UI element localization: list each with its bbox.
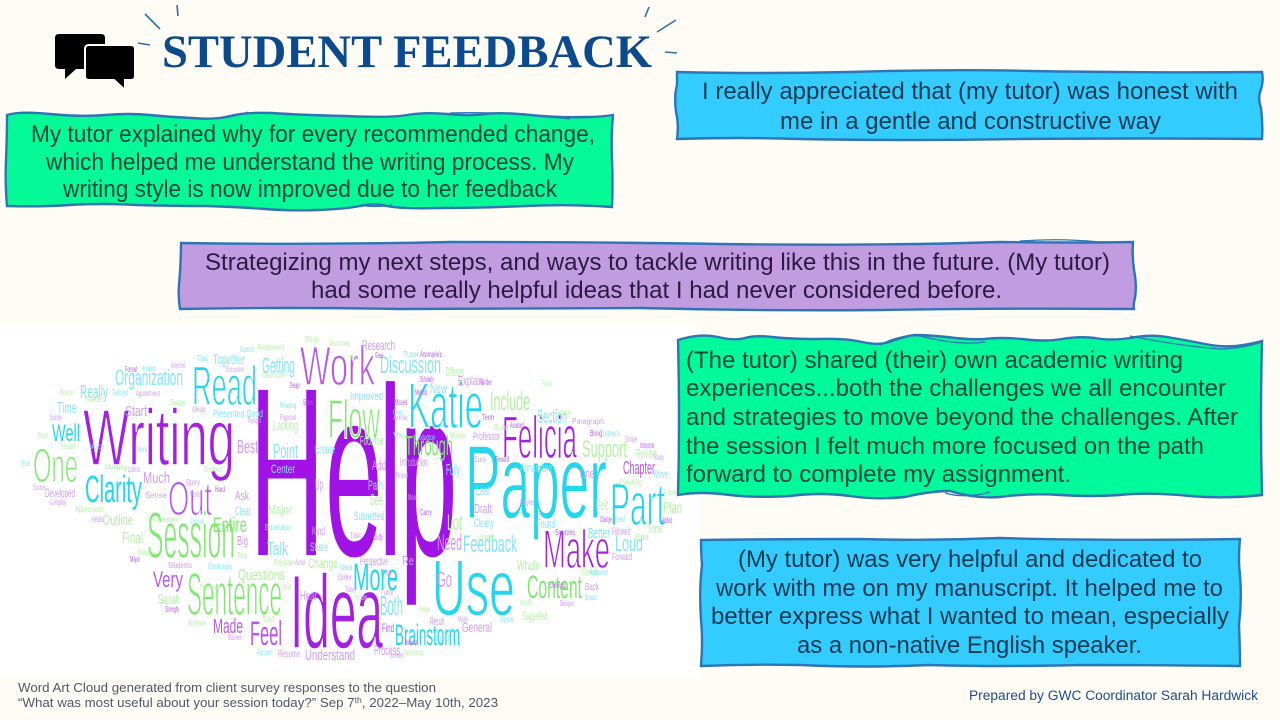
title rays — [138, 5, 677, 53]
medium words: Center — [271, 462, 295, 476]
medium words: Result — [430, 616, 444, 628]
quote text: I really appreciated that (my tutor) was honest with — [702, 78, 1238, 105]
medium words: Discussion — [380, 352, 441, 379]
tiny filler words: Simple — [625, 435, 637, 444]
medium words: Through — [405, 430, 453, 461]
large words — [33, 334, 665, 671]
tiny filler words: Edit — [635, 533, 650, 542]
large words: Session — [147, 498, 235, 572]
tiny filler words: Evidence — [138, 548, 153, 557]
quote text: My tutor explained why for every recommended change, — [31, 121, 595, 148]
medium words: Share — [310, 540, 328, 554]
footnote: word cloud source: th — [355, 696, 362, 705]
large words: Writing — [83, 393, 235, 482]
medium words: Felt — [596, 497, 608, 514]
tiny filler words: Recommend — [258, 343, 284, 352]
medium words: Professor — [473, 431, 500, 443]
tiny filler words: Hope — [420, 605, 430, 614]
tiny filler words: Hard — [215, 485, 225, 494]
medium words: More — [353, 557, 398, 599]
medium words: Fully — [446, 462, 460, 479]
medium words: Path — [368, 477, 383, 493]
tiny filler words: Explanation — [265, 523, 291, 532]
tiny filler words: Tips — [197, 354, 208, 363]
tiny filler words: Helpful — [92, 515, 104, 524]
tiny filler words: Think — [380, 568, 393, 577]
tiny filler words: Writer — [480, 378, 492, 387]
panel: quote about manuscript help — [700, 538, 1241, 666]
tiny filler words: Format — [125, 365, 137, 374]
medium words: Best — [237, 437, 258, 457]
medium words: Feedback — [463, 531, 518, 558]
tiny filler words: Summary — [390, 651, 404, 660]
tiny filler words: Source — [33, 483, 45, 492]
tiny filler words: Complete — [50, 498, 66, 507]
tiny filler words: Position — [274, 558, 294, 567]
medium words: Found — [537, 516, 555, 531]
tiny filler words: Encounter — [226, 365, 244, 374]
tiny filler words: Academic — [142, 364, 156, 373]
tiny filler words: Below — [305, 335, 319, 344]
quote text: as a non-native English speaker. — [797, 632, 1142, 659]
medium words: Clearly — [474, 516, 494, 530]
tiny filler words: Vs — [393, 431, 403, 440]
medium words: Up — [315, 477, 323, 494]
medium words: Plan — [663, 500, 682, 517]
panel: quote about shared academic experiences — [678, 335, 1262, 498]
large words: Felicia — [502, 404, 577, 471]
medium words: Find — [382, 621, 394, 635]
medium words: Line — [580, 465, 594, 481]
medium words: Final — [122, 530, 143, 547]
medium words: Very — [153, 567, 183, 592]
medium words: Outline — [103, 512, 133, 529]
medium words: Clear — [235, 504, 251, 518]
tiny filler words: Matter — [458, 615, 468, 624]
medium words: Better — [588, 525, 610, 542]
medium words: Go — [437, 567, 452, 592]
tiny filler words: Design — [290, 381, 300, 390]
footnote: word cloud source — [18, 681, 498, 710]
medium words: Include — [490, 386, 530, 416]
medium words: Getting — [262, 353, 295, 378]
tiny filler words: Mean — [408, 493, 418, 502]
tiny filler words: Concise — [190, 517, 204, 526]
large words: Read — [192, 354, 257, 417]
tiny filler words: Incorporate — [640, 441, 654, 450]
tiny filler words: Sure — [474, 455, 486, 464]
medium words: Loud — [615, 531, 643, 556]
quote text: experiences...both the challenges we all encounter — [686, 375, 1226, 402]
tiny filler words — [22, 335, 688, 660]
largest word: Help — [250, 339, 457, 607]
tiny filler words: Thought — [247, 416, 261, 425]
medium words: Lacking — [273, 417, 298, 433]
quote text: better express what I wanted to mean, especially — [711, 603, 1229, 630]
large words: Flow — [328, 388, 380, 450]
quote text: which helped me understand the writing process. My — [45, 149, 574, 176]
tiny filler words: Production — [415, 433, 435, 442]
tiny filler words: Used — [615, 515, 625, 524]
large words: Out — [168, 473, 212, 526]
tiny filler words: Super — [170, 398, 186, 407]
medium words: General — [462, 619, 492, 635]
tiny filler words: Explore — [60, 388, 73, 397]
medium words: Understand — [305, 647, 355, 664]
tiny filler words: Unit — [283, 583, 291, 592]
medium words: See — [370, 492, 383, 509]
tiny filler words: Challenges — [208, 562, 232, 571]
large words: Paper — [465, 424, 607, 541]
large words: Make — [543, 518, 610, 580]
tiny filler words: Task — [237, 551, 248, 560]
large words: Sentence — [187, 561, 282, 628]
medium words: Start — [125, 403, 148, 420]
tiny filler words: Latest — [128, 465, 140, 474]
tiny filler words: Tutor — [380, 588, 394, 597]
tiny filler words: Reword — [495, 455, 509, 464]
panel: quote about strategizing next steps — [179, 240, 1136, 310]
medium words: Back — [585, 582, 600, 593]
medium words: Both — [380, 590, 403, 621]
footnote: word cloud source: “What was most useful about your session today?” Sep 7 — [18, 696, 334, 710]
tiny filler words: Proposal — [280, 413, 296, 422]
medium words: Change — [308, 555, 338, 571]
tiny filler words: Example — [50, 413, 62, 422]
tiny filler words: Method — [415, 388, 427, 397]
tiny filler words: Picture — [555, 408, 571, 417]
tiny filler words: Module — [450, 431, 466, 440]
medium words: Feel — [250, 615, 282, 653]
tiny filler words: Voice — [90, 442, 104, 451]
tiny filler words: Scholarly — [420, 375, 434, 384]
tiny filler words: Appointment — [136, 389, 160, 398]
tiny filler words: Already — [192, 405, 206, 414]
tiny filler words: Today's — [600, 429, 620, 438]
tiny filler words: Voice — [190, 490, 202, 499]
medium words: Developed — [45, 486, 75, 500]
medium words: Press — [436, 633, 450, 645]
tiny filler words: Appreciate — [75, 505, 103, 514]
medium words: Made — [213, 616, 243, 638]
quote text — [711, 546, 1229, 659]
medium words: Support — [582, 436, 627, 463]
tiny filler words: Writers — [350, 353, 360, 362]
quote text: Strategizing my next steps, and ways to tackle writing like this in the future. (My tutor) — [205, 249, 1110, 276]
tiny filler words: Meaning — [280, 401, 296, 410]
tiny filler words: Gather — [85, 395, 103, 404]
medium words: Re — [402, 553, 414, 568]
large words: Katie — [408, 369, 483, 442]
medium words: Presented Good — [213, 409, 263, 420]
tiny filler words: Future — [664, 488, 676, 497]
medium words: Forward — [612, 552, 632, 563]
medium words: Talk — [267, 539, 289, 559]
tiny filler words: Sources — [555, 528, 575, 537]
word cloud — [0, 326, 700, 678]
tiny filler words: End — [22, 459, 30, 468]
tiny filler words: Assignment — [590, 568, 608, 577]
quote text — [31, 121, 595, 203]
quote text — [702, 78, 1238, 135]
quote text: the session I felt much more focused on the path — [686, 433, 1204, 460]
tiny filler words: Construction — [262, 371, 284, 380]
tiny filler words: Focus — [542, 379, 552, 388]
medium words: Big — [237, 533, 248, 548]
tiny filler words: Missed — [395, 398, 407, 407]
quote text: writing style is now improved due to her feedback — [62, 176, 558, 203]
tiny filler words: Unify — [373, 533, 383, 542]
medium words: Chapter — [623, 458, 655, 478]
tiny filler words: Information — [147, 515, 179, 524]
medium words: Resume — [278, 649, 300, 660]
tiny filler words: Show — [303, 398, 313, 407]
large words: Work — [300, 334, 376, 397]
medium words: Tone — [647, 520, 663, 536]
footnote: word cloud source: , 2022–May 10th, 2023 — [362, 696, 498, 710]
tiny filler words: Interpret — [171, 361, 185, 370]
tiny filler words: Major — [130, 555, 140, 564]
medium words: Research — [362, 337, 395, 353]
tiny filler words: Article — [188, 619, 206, 628]
tiny filler words: Organized — [500, 615, 514, 624]
medium words: Major — [268, 502, 292, 517]
tiny filler words: Today — [345, 585, 355, 594]
tiny filler words: Paper — [38, 431, 48, 440]
quote text: had some really helpful ideas that I had never considered before. — [311, 277, 1002, 304]
tiny filler words: Paragraph — [572, 417, 604, 426]
tiny filler words: Assistant — [510, 421, 524, 430]
medium words: Suggested — [522, 609, 547, 623]
word cloud: Grant — [680, 483, 688, 492]
tiny filler words: Added — [662, 516, 672, 525]
large words: One — [33, 440, 78, 493]
medium words: Well — [52, 420, 80, 447]
footnote: word cloud source: Word Art Cloud generated from client survey responses to the question — [18, 681, 436, 695]
medium words: Annamarie — [520, 460, 552, 475]
medium words: Hear — [300, 588, 317, 603]
tiny filler words: Gained — [204, 465, 222, 474]
tiny filler words: Tutor — [403, 350, 419, 359]
tiny filler words: Avoid — [295, 558, 305, 567]
tiny filler words: Maureen — [228, 633, 242, 642]
tiny filler words: Order — [338, 573, 352, 582]
medium words: Sarah — [158, 591, 180, 607]
medium words: Together — [213, 351, 245, 367]
tiny filler words: Bring — [590, 429, 602, 438]
tiny filler words: Recount — [257, 648, 271, 657]
medium words: Section — [537, 407, 567, 428]
tiny filler words: Structure — [200, 583, 216, 592]
medium words: Clarity — [85, 469, 142, 511]
medium words: Time — [57, 400, 77, 417]
medium words: Introduction — [400, 455, 428, 469]
medium words: Questions — [238, 567, 285, 584]
tiny filler words: Change — [600, 515, 612, 524]
quote text — [686, 347, 1238, 488]
large words: Idea — [290, 554, 383, 671]
tiny filler words: Basic — [585, 593, 597, 602]
medium words: Ensure — [315, 442, 335, 456]
tiny filler words: Strength — [165, 605, 179, 614]
medium words: Draft — [474, 501, 492, 516]
tiny filler words: Gave — [375, 351, 383, 360]
medium words: Kind — [312, 524, 325, 538]
medium words: Whole — [517, 557, 540, 573]
tiny filler words: Study — [654, 453, 664, 462]
medium words: Content — [527, 569, 582, 605]
tiny filler words: Work — [137, 445, 148, 454]
tiny filler words: Style — [520, 498, 534, 507]
tiny filler words: Told — [262, 615, 274, 624]
medium words: Overall — [582, 567, 597, 578]
tiny filler words: Build — [494, 423, 508, 432]
tiny filler words: Carry — [420, 508, 432, 517]
tiny filler words: Anna — [393, 413, 407, 422]
panel: quote about tutor explaining changes — [6, 112, 613, 210]
tiny filler words: Dialogue — [560, 599, 574, 608]
icon: speech bubbles — [55, 34, 135, 90]
medium words: Really — [80, 382, 108, 402]
medium words: Brainstorm — [395, 619, 460, 652]
quote text: and strategies to move beyond the challenges. After — [686, 404, 1238, 431]
quote text: work with me on my manuscript. It helped me to — [715, 575, 1223, 602]
tiny filler words: Sense — [145, 491, 168, 500]
medium words: Submitted — [354, 509, 384, 523]
tiny filler words: Students — [168, 561, 192, 570]
medium words: Add — [372, 457, 386, 473]
medium words — [45, 337, 682, 664]
tiny filler words: Brand — [396, 471, 408, 480]
medium words: Different — [446, 364, 464, 379]
tiny filler words: Manuscript — [405, 638, 417, 647]
tiny filler words: Ideal — [340, 563, 352, 572]
tiny filler words: Concerned — [403, 648, 423, 657]
quote text — [205, 249, 1110, 304]
medium words: Explain — [458, 373, 483, 388]
title: STUDENT FEEDBACK — [162, 26, 652, 78]
tiny filler words: Tailored — [112, 388, 128, 397]
medium words: Need — [437, 530, 462, 555]
credit line: Prepared by GWC Coordinator Sarah Hardwick — [969, 688, 1258, 703]
medium words: Organization — [115, 365, 183, 390]
medium words: Revise — [636, 446, 657, 461]
tiny filler words: Unhelpful — [550, 581, 566, 590]
medium words: Lot — [447, 510, 462, 535]
tiny filler words: Meeting — [105, 463, 127, 472]
tiny filler words: Term — [482, 413, 494, 422]
medium words: Point — [273, 441, 298, 463]
quote text: (My tutor) was very helpful and dedicated to — [738, 546, 1202, 573]
medium words: Followed — [612, 526, 630, 538]
medium words: Last — [476, 482, 490, 498]
tiny filler words: Crunch — [240, 345, 254, 354]
medium words: Focused — [360, 433, 383, 448]
large words: Part — [610, 471, 665, 538]
large words: Use — [432, 543, 515, 632]
quote text: forward to complete my assignment. — [686, 461, 1071, 488]
tiny filler words: Strategies — [480, 533, 496, 542]
medium words: New — [430, 380, 448, 396]
medium words: Much — [143, 470, 170, 487]
medium words: Perspective — [360, 554, 388, 568]
tiny filler words: Brainstorming — [330, 339, 350, 348]
tiny filler words: Annmarie's — [420, 350, 442, 359]
medium words: Improved — [350, 389, 383, 403]
tiny filler words: Everything — [620, 478, 642, 487]
tiny filler words: Over — [393, 408, 403, 417]
medium words: Process — [374, 642, 400, 658]
quote text: me in a gentle and constructive way — [780, 108, 1161, 135]
tiny filler words: Unsure — [355, 593, 367, 602]
medium words: Entire — [213, 514, 247, 537]
tiny filler words: Transition — [60, 442, 76, 451]
medium words: Move — [654, 467, 668, 481]
medium words: Ask — [235, 488, 249, 503]
tiny filler words: Topic — [350, 531, 362, 540]
panel: quote about honest tutor — [675, 70, 1263, 140]
tiny filler words: Insight — [520, 598, 532, 607]
tiny filler words: Story — [186, 478, 200, 487]
quote text: (The tutor) shared (their) own academic writing — [686, 347, 1183, 374]
